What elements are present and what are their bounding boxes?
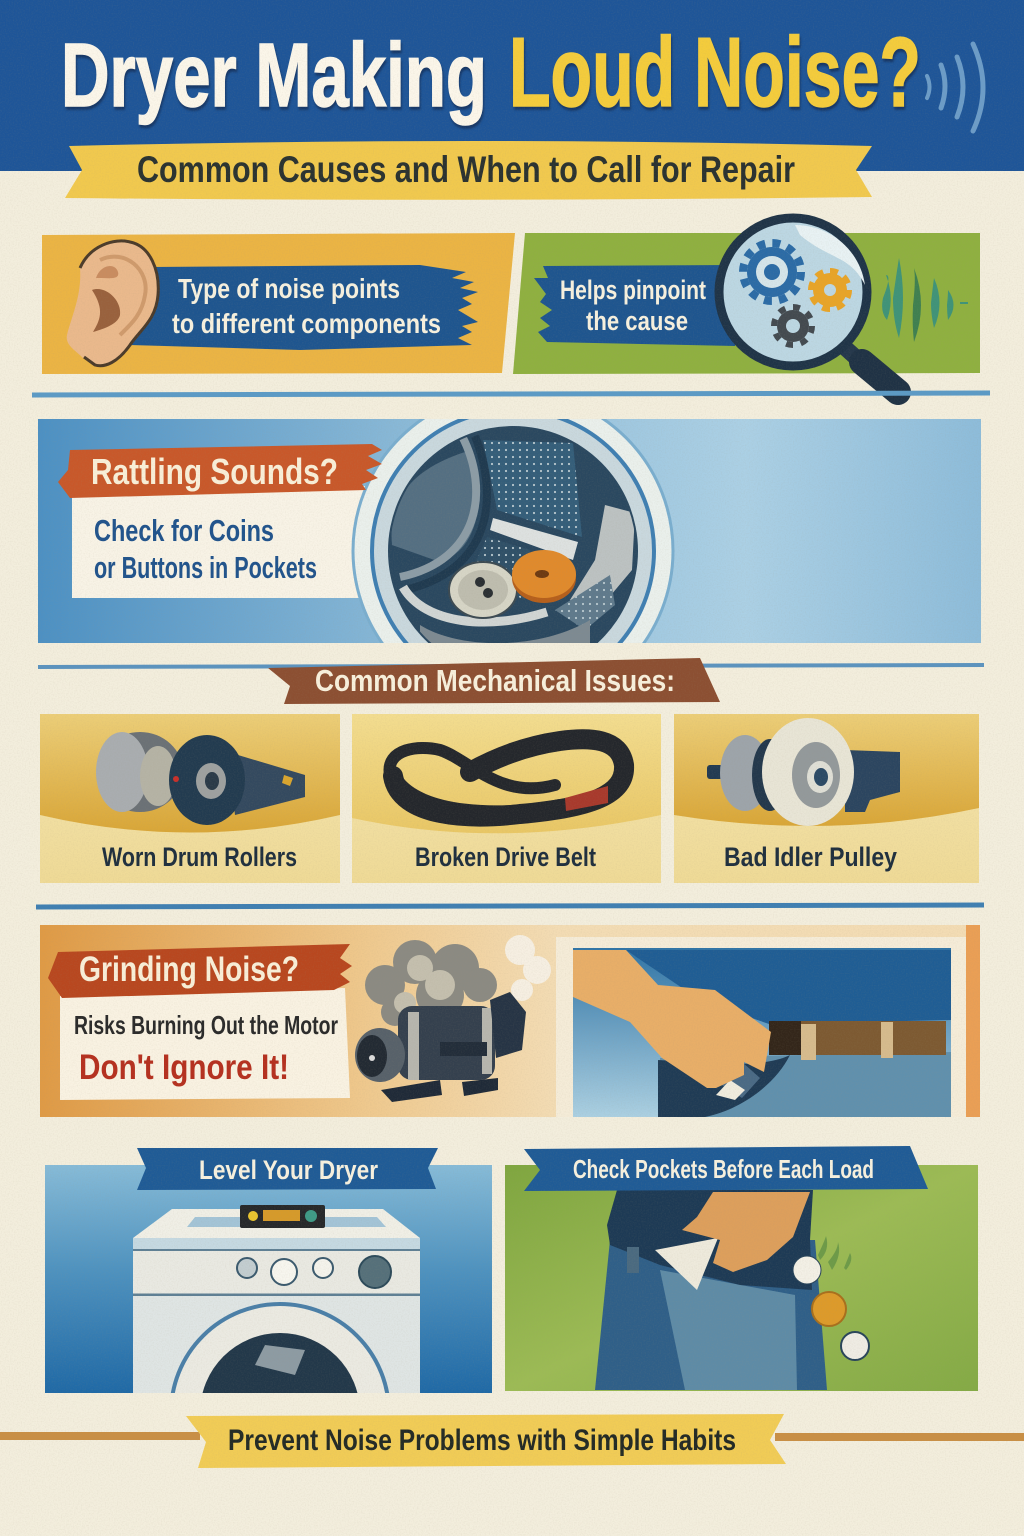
subtitle ribbon — [65, 141, 872, 200]
ribbon: common mechanical issues — [268, 658, 720, 704]
ribbon: check pockets — [524, 1146, 928, 1191]
ribbon: rattling sounds: Rattling Sounds? — [91, 451, 338, 492]
panel: worn drum rollers: Worn Drum Rollers — [102, 842, 297, 872]
text banner: type of noise: to different components — [172, 308, 441, 339]
icon: sound waves — [927, 44, 983, 131]
panel: check pockets — [505, 1146, 978, 1391]
ribbon: common mechanical issues: Common Mechanical Issues: — [315, 663, 675, 698]
illustration: hand in pocket — [573, 948, 951, 1117]
ribbon: check pockets: Check Pockets Before Each Load — [573, 1154, 874, 1184]
panel: bad idler pulley — [674, 714, 979, 883]
text card: check for coins: Check for Coins — [94, 513, 274, 548]
icon: green sound waves — [882, 258, 968, 342]
icon: coin — [512, 550, 576, 603]
icon: ear — [67, 241, 158, 366]
icon: smoke — [365, 935, 551, 1026]
subtitle ribbon: Common Causes and When to Call for Repair — [137, 149, 795, 190]
footer line — [0, 1436, 1024, 1437]
icon: drum roller — [96, 732, 305, 825]
text banner: pinpoint: Helps pinpoint — [560, 275, 706, 305]
icon: magnifying glass — [719, 218, 898, 392]
divider — [38, 665, 984, 667]
panel: bad idler pulley: Bad Idler Pulley — [724, 842, 897, 872]
panel: pinpoint the cause — [513, 218, 980, 392]
ribbon: level your dryer: Level Your Dryer — [199, 1155, 378, 1185]
divider — [36, 905, 984, 907]
text banner: pinpoint — [534, 265, 735, 346]
icon: dryer — [133, 1209, 420, 1393]
icon: pocket items — [793, 1236, 869, 1360]
text banner: type of noise: Type of noise points — [178, 273, 400, 304]
footer ribbon: Prevent Noise Problems with Simple Habits — [228, 1424, 736, 1457]
divider — [32, 393, 990, 395]
text banner: type of noise — [130, 265, 478, 350]
text card: check for coins — [72, 486, 392, 598]
illustration: jeans — [595, 1190, 827, 1390]
panel: level your dryer — [45, 1148, 492, 1393]
ribbon: rattling sounds — [58, 444, 382, 498]
text card: risks — [60, 988, 350, 1100]
title: Dryer Making — [61, 26, 487, 126]
icon: button — [449, 562, 517, 618]
footer ribbon — [186, 1414, 786, 1468]
panel: broken drive belt — [352, 714, 661, 883]
icon: spirit level — [240, 1205, 325, 1228]
text card: check for coins: or Buttons in Pockets — [94, 550, 317, 585]
text card: risks: Don't Ignore It! — [79, 1048, 289, 1087]
panel: rattling sounds — [38, 419, 981, 643]
drum window — [352, 419, 674, 643]
title — [61, 17, 921, 127]
header band — [0, 0, 1024, 171]
icon: motor — [355, 992, 526, 1102]
panel: broken drive belt: Broken Drive Belt — [415, 842, 596, 872]
icon: drive belt — [390, 739, 624, 816]
panel: grinding noise — [40, 925, 980, 1117]
ribbon: grinding noise — [48, 944, 352, 998]
panel: type of noise — [42, 233, 515, 374]
ribbon: grinding noise: Grinding Noise? — [79, 950, 299, 989]
ribbon: level your dryer — [137, 1148, 438, 1190]
panel: worn drum rollers — [40, 714, 340, 883]
text banner: pinpoint: the cause — [586, 306, 688, 336]
icon: idler pulley — [707, 718, 900, 826]
text card: risks: Risks Burning Out the Motor — [74, 1010, 338, 1040]
